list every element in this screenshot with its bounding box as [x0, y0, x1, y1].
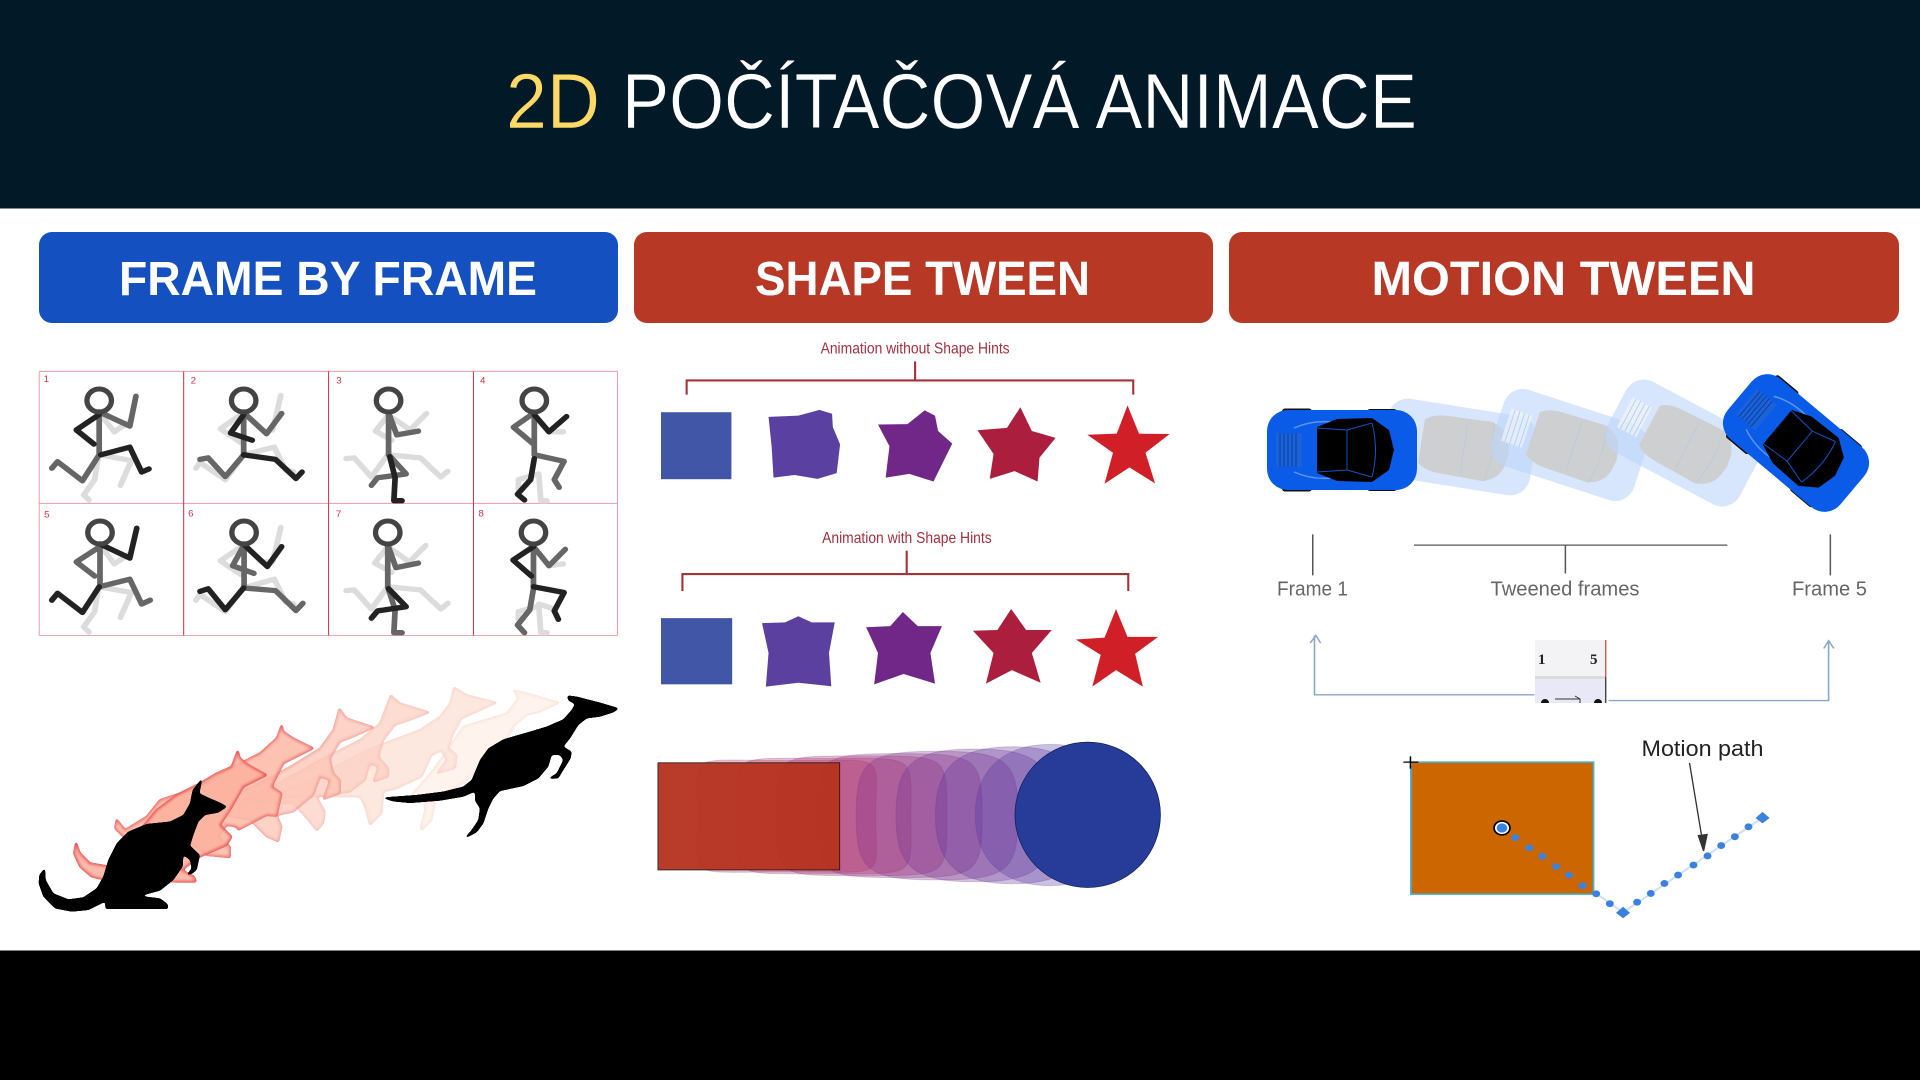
motion path arrow: [1690, 763, 1707, 851]
kangaroo: sitting start frame: [39, 777, 227, 912]
bracket: with shape hints: [682, 551, 1128, 591]
frame 3: 3: [336, 376, 342, 387]
frame 6: 6: [188, 509, 194, 519]
shape row with hints: [661, 609, 1158, 687]
square to circle morph: [658, 742, 1160, 888]
ghost frame 5: [267, 687, 497, 825]
panel: shape tween examples: [658, 341, 1170, 888]
heading: motion tween: MOTION TWEEN: [1372, 253, 1756, 306]
title: POČÍTAČOVÁ ANIMACE: [622, 57, 1417, 145]
car: frame 5: [1714, 365, 1878, 521]
frame 8: 8: [478, 509, 484, 519]
frame 7: [336, 509, 448, 633]
heading: frame by frame: [39, 232, 618, 323]
ghost frame 4: [213, 695, 429, 831]
heading: shape tween: [634, 232, 1213, 323]
timeline thumbnail: [1535, 640, 1606, 703]
frame 7: 7: [336, 509, 341, 520]
panel: stick figure run cycle grid: [39, 371, 618, 635]
heading: motion tween: [1229, 232, 1899, 323]
frame 4: 4: [480, 376, 485, 387]
dotted path: [1511, 812, 1770, 918]
ghost frame 3: [160, 708, 374, 842]
title: 2D: [506, 57, 600, 145]
orange object: [1411, 762, 1594, 894]
shape row without hints: [661, 405, 1170, 484]
frame 1: 1: [44, 374, 49, 385]
header band: [0, 0, 1920, 208]
frame 5: [44, 510, 150, 632]
panel: motion tween car: [1267, 365, 1878, 918]
leader lines: [1313, 534, 1830, 575]
ghost frame 2: [115, 725, 313, 857]
heading: shape tween: SHAPE TWEEN: [755, 253, 1090, 306]
kangaroo: jumping end frame: [381, 695, 619, 839]
label: with shape hints: Animation with Shape Hints: [822, 530, 992, 547]
frame 3: [336, 376, 448, 501]
panel: kangaroo frame by frame jump: [39, 687, 619, 912]
timeline thumbnail: 5: [1590, 652, 1598, 668]
frame 8: [478, 509, 565, 633]
label: tweened frames: Tweened frames: [1490, 578, 1640, 600]
bracket: without shape hints: [687, 361, 1133, 395]
car: frame 1: [1267, 408, 1417, 492]
arrows to keyframes: [1310, 635, 1834, 701]
frame 5: 5: [44, 510, 50, 520]
frame 2: [191, 376, 302, 480]
registration point: [1494, 821, 1510, 835]
motion path diagram: [1403, 756, 1770, 918]
label: motion path: Motion path: [1642, 736, 1764, 761]
frame 4: [480, 376, 567, 501]
heading: frame by frame: FRAME BY FRAME: [119, 253, 537, 306]
frame 2: 2: [191, 376, 196, 387]
frame 6: [188, 509, 303, 612]
frame 1: [44, 374, 149, 500]
crosshair: [1403, 756, 1418, 769]
label: without shape hints: Animation without Shape Hints: [821, 341, 1010, 358]
label: frame 5: Frame 5: [1792, 578, 1867, 600]
white content area: [0, 208, 1920, 950]
bottom black band: [0, 950, 1920, 1080]
ghost frame 1: [74, 751, 267, 882]
tweened car frames: [1379, 372, 1768, 514]
ghost frame 6: [393, 690, 559, 830]
timeline thumbnail: 1: [1538, 652, 1546, 668]
label: frame 1: Frame 1: [1277, 578, 1348, 600]
